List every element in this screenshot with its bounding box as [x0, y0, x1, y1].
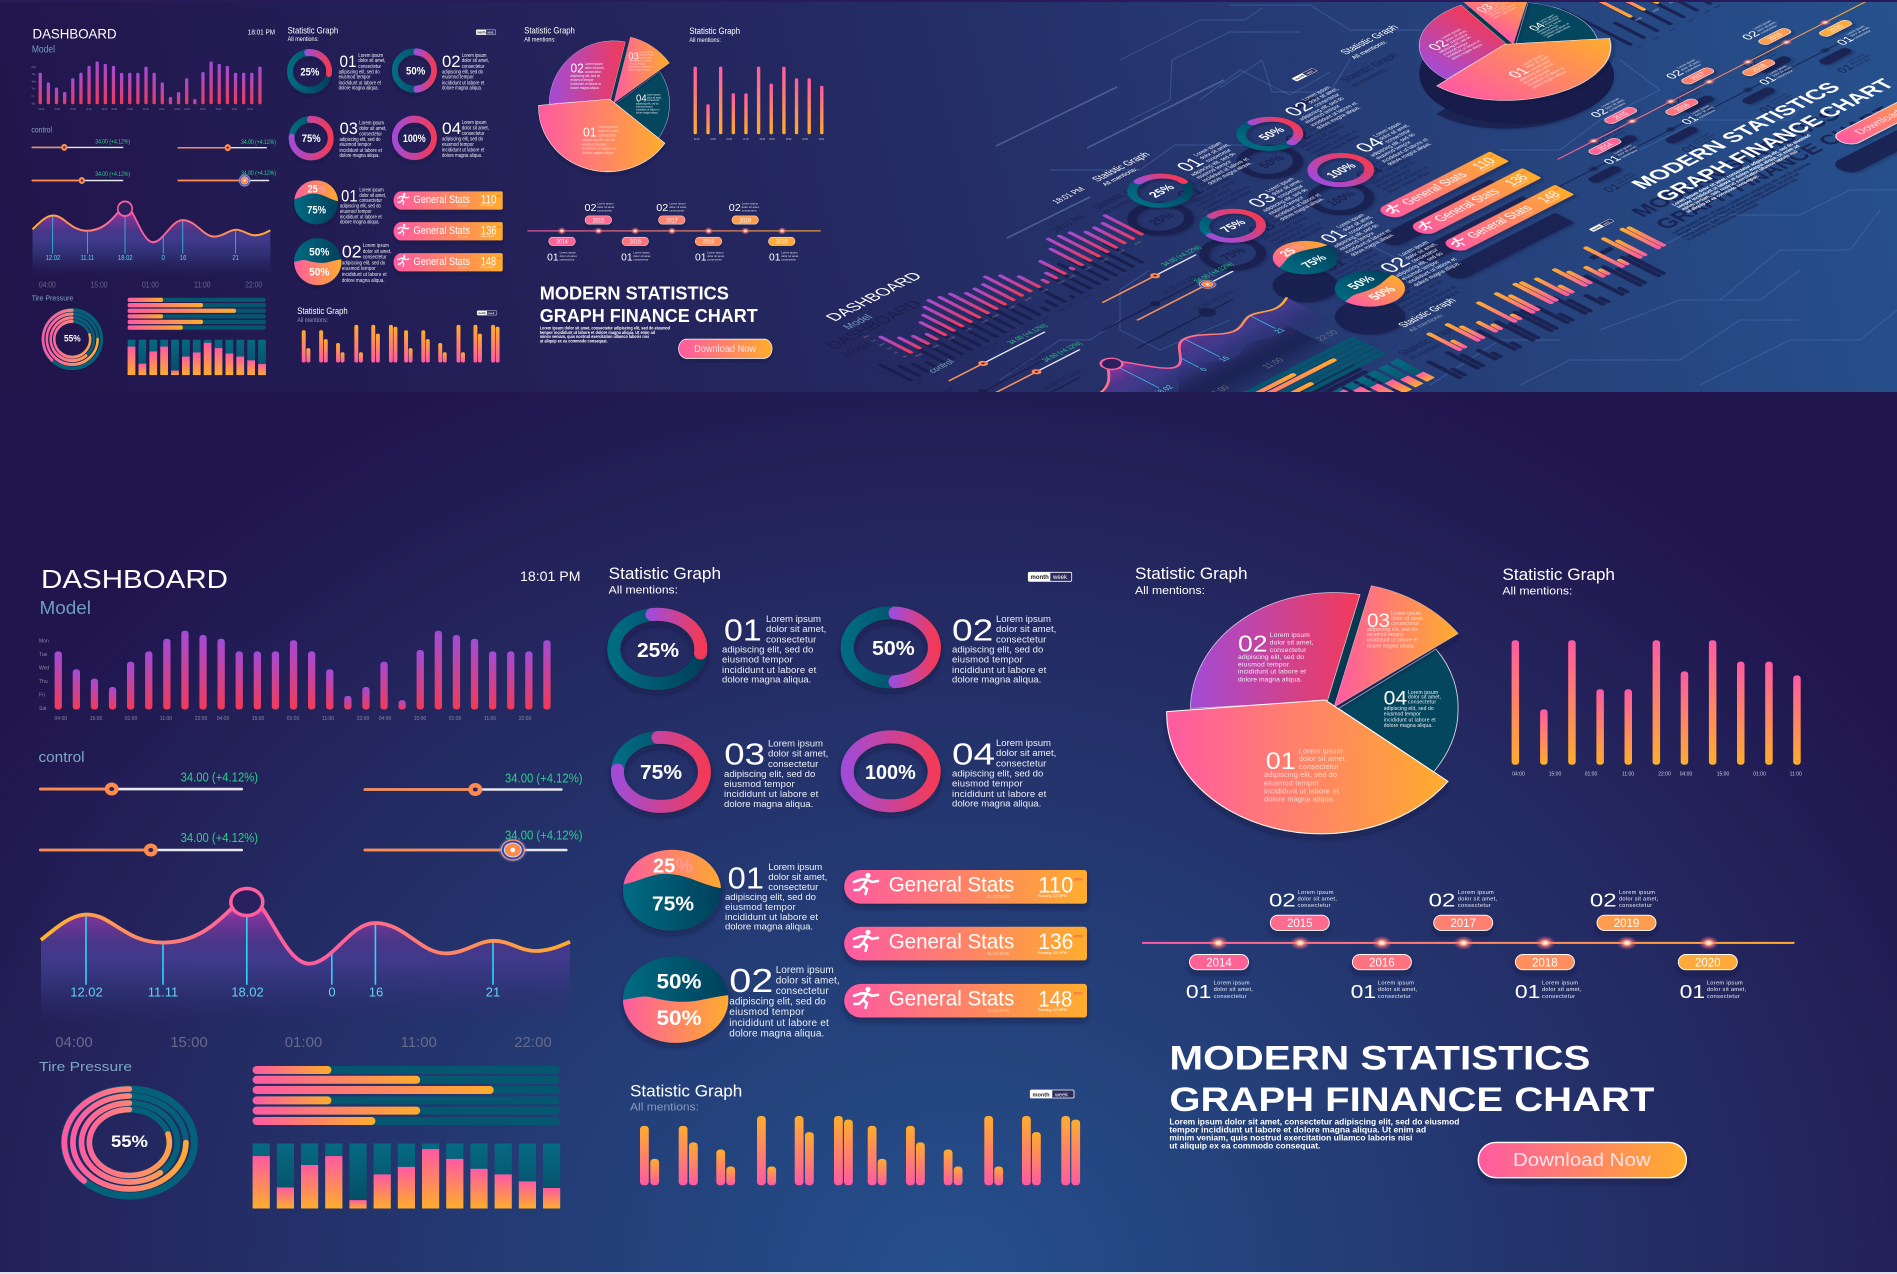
- text block 02: eiusmod tempor: [952, 654, 1023, 666]
- text block 03: dolor sit amet,: [768, 749, 828, 760]
- general stats bar 148: Running 110 BPM: [1038, 1008, 1067, 1012]
- upper timeline notes: consectetur: [1458, 903, 1491, 909]
- time axis labels: 04:00: [55, 716, 67, 722]
- slice 01: [1167, 700, 1448, 834]
- upper timeline notes: dolor sit amet,: [1298, 896, 1337, 902]
- time axis labels: 11:00: [484, 716, 496, 722]
- slice 03 text: dolore magna aliqua.: [1367, 643, 1415, 649]
- small flat preview of the dashboard: [31, 25, 825, 375]
- slider 2: [364, 772, 582, 796]
- text block split 02: 02: [729, 962, 773, 999]
- general stats bar 148: 148: [1038, 986, 1072, 1011]
- lower timeline notes: [1186, 980, 1747, 1002]
- icon: runner: [854, 873, 878, 894]
- upper timeline notes: consectetur: [1298, 903, 1331, 909]
- upper timeline notes: 02: [1429, 889, 1455, 910]
- text block 03: eiusmod tempor: [724, 779, 795, 790]
- statistic graph heading, thin bars: All mentions:: [1502, 586, 1572, 598]
- dark extruded shadow copy: [826, 2, 1897, 392]
- text block split 01: Lorem ipsum: [768, 862, 822, 873]
- stacked vertical bars: [253, 1144, 560, 1208]
- slice 03: [1334, 586, 1458, 707]
- split circle 25 and 75 percent: [620, 845, 725, 931]
- time axis: [55, 1034, 552, 1051]
- pie chart extruded shadow: [1420, 60, 1614, 124]
- timeline glow points: [1208, 936, 1719, 950]
- text block 02: adipiscing elit, sed do: [952, 645, 1043, 656]
- text block 01: incididunt ut labore et: [722, 665, 817, 676]
- split circle 25 and 75 percent: 25%: [653, 855, 693, 877]
- text block 02: [952, 613, 1056, 686]
- upper timeline notes: 02: [1590, 889, 1617, 910]
- slice 04: [1339, 649, 1458, 772]
- value labels: 12.02: [70, 984, 103, 1000]
- slice 02 text: eiusmod tempor: [1238, 662, 1290, 668]
- slice 04 text: consectetur: [1408, 700, 1436, 706]
- model heading: Model: [40, 598, 91, 618]
- statistic graph heading, paired bars: [630, 1081, 742, 1114]
- lower timeline notes: Lorem ipsum: [1542, 980, 1578, 986]
- upper timeline notes: dolor sit amet,: [1619, 896, 1659, 902]
- text block 01: Lorem ipsum: [766, 614, 821, 625]
- time axis: 01:00: [285, 1034, 322, 1051]
- thin bar time labels: 15:00: [1717, 771, 1729, 777]
- slice 03 text: consectetur: [1391, 621, 1419, 627]
- main flat dashboard: [38, 564, 1802, 1208]
- general stats bar 110: Running 110 BPM: [1038, 894, 1067, 898]
- slice 02 text: [1238, 630, 1313, 683]
- upper timeline notes: Lorem ipsum: [1298, 890, 1334, 896]
- dashboard title: DASHBOARD: [41, 564, 228, 594]
- thin bar time labels: 01:00: [1585, 771, 1597, 777]
- text block split 01: adipiscing elit, sed do: [725, 892, 816, 903]
- time axis labels: 11:00: [322, 716, 334, 722]
- text block 04: 04: [952, 736, 995, 771]
- day axis labels: Thu: [39, 679, 48, 685]
- month week toggle: week: [1054, 1092, 1068, 1098]
- time axis labels: 11:00: [160, 716, 172, 722]
- time axis labels: 01:00: [125, 716, 137, 722]
- slice 03 text: Lorem ipsum: [1391, 611, 1421, 617]
- statistic graph heading, thin bars: [1502, 565, 1615, 598]
- slice 01 text: Lorem ipsum: [1299, 747, 1343, 756]
- donut 100 percent: 100%: [865, 762, 916, 784]
- time axis labels: 15:00: [414, 716, 426, 722]
- lower timeline notes: dolor sit amet,: [1707, 987, 1747, 993]
- general stats bar 148: General Stats: [889, 987, 1014, 1010]
- text block 04: eiusmod tempor: [952, 778, 1023, 790]
- text block 04: [952, 736, 1056, 810]
- general stats bar 136: Running 110 BPM: [1038, 951, 1067, 955]
- day axis labels: Wed: [39, 666, 49, 672]
- lower timeline notes: dolor sit amet,: [1214, 987, 1253, 993]
- time axis labels: 04:00: [217, 716, 229, 722]
- text block 03: adipiscing elit, sed do: [724, 769, 815, 780]
- year labels: 2016: [1369, 957, 1395, 969]
- text block 01: dolore magna aliqua.: [722, 675, 811, 686]
- text block split 01: dolore magna aliqua.: [725, 922, 813, 933]
- time axis labels: 22:00: [195, 716, 207, 722]
- text block 02: 02: [952, 613, 993, 648]
- main headline: [1169, 1040, 1655, 1119]
- upper timeline notes: dolor sit amet,: [1458, 896, 1498, 902]
- tire pressure heading: Tire Pressure: [39, 1059, 132, 1074]
- general stats bar 136: General Stats: [889, 930, 1014, 953]
- text block 01: eiusmod tempor: [722, 654, 793, 666]
- month week toggle: week: [1052, 575, 1068, 581]
- lower timeline notes: dolor sit amet,: [1378, 987, 1418, 993]
- text block split 02: Lorem ipsum: [776, 965, 834, 976]
- horizontal progress bars: [253, 1066, 560, 1125]
- year labels: [1206, 918, 1721, 969]
- statistic graph heading, donut section: Statistic Graph: [609, 564, 721, 583]
- statistic graph heading, pie chart: All mentions:: [1135, 585, 1205, 597]
- split circle 50 and 50 percent: 50%: [656, 1007, 702, 1030]
- upper timeline notes: consectetur: [1619, 903, 1652, 909]
- general stats bar 136: 136: [1038, 929, 1073, 954]
- upper timeline notes: [1269, 889, 1659, 910]
- slice 02 text: dolor sit amet,: [1270, 640, 1313, 647]
- slice 01 text: [1264, 747, 1347, 803]
- time axis labels: [55, 716, 531, 722]
- slice 03 text: [1367, 611, 1424, 649]
- text block 03: dolore magna aliqua.: [724, 799, 813, 810]
- slice 01 text: incididunt ut labore et: [1264, 786, 1339, 795]
- control heading: control: [38, 749, 84, 766]
- slider 1: [39, 771, 258, 796]
- year labels: 2017: [1450, 918, 1476, 930]
- general stats bar 110: 110: [1038, 872, 1073, 897]
- lower timeline notes: consectetur: [1214, 994, 1247, 1000]
- model bar chart: [39, 631, 551, 722]
- thin bar time labels: 22:00: [1658, 771, 1671, 777]
- year labels: 2014: [1206, 957, 1232, 969]
- slice 04 text: 04: [1384, 688, 1408, 710]
- slice 04 text: adipiscing elit, sed do: [1384, 706, 1434, 712]
- year labels: 2020: [1695, 957, 1721, 969]
- lower background panel: [0, 392, 1897, 1274]
- lower timeline notes: 01: [1351, 981, 1376, 1002]
- text block split 02: [729, 962, 840, 1040]
- thin bar chart: [1512, 640, 1802, 777]
- lower timeline notes: consectetur: [1707, 994, 1740, 1000]
- lower timeline notes: Lorem ipsum: [1707, 980, 1743, 986]
- text block 02: consectetur: [996, 634, 1047, 645]
- month week toggle: [1030, 1090, 1074, 1098]
- general stats bar 136: [844, 927, 1087, 960]
- text block 03: incididunt ut labore et: [724, 789, 819, 800]
- text block 02: Lorem ipsum: [996, 614, 1051, 625]
- statistic graph heading, donut section: [609, 564, 721, 596]
- time axis: 11:00: [400, 1034, 437, 1051]
- general stats bar 148: BPM: [1074, 990, 1083, 995]
- text block 04: dolor sit amet,: [996, 748, 1056, 759]
- split circle 25 and 75 percent: 75%: [652, 894, 694, 916]
- text block 01: consectetur: [766, 634, 817, 645]
- split circle 50 and 50 percent: 50%: [656, 970, 702, 993]
- text block 03: [724, 737, 828, 810]
- donut 50 percent: [847, 613, 934, 682]
- statistic graph heading, thin bars: Statistic Graph: [1502, 565, 1615, 584]
- slice 02 text: Lorem ipsum: [1270, 632, 1310, 639]
- slice 03 text: dolor sit amet,: [1391, 616, 1424, 622]
- general stats bar 136: BPM: [1074, 933, 1083, 938]
- slider 4 with glowing knob: [364, 829, 582, 863]
- year labels: 2018: [1532, 957, 1558, 969]
- tire pressure concentric ring chart: 55%: [111, 1132, 148, 1151]
- text block 01: adipiscing elit, sed do: [722, 645, 813, 656]
- text block 02: dolore magna aliqua.: [952, 675, 1041, 686]
- time axis labels: 22:00: [357, 716, 369, 722]
- thin bar time labels: 04:00: [1512, 771, 1525, 777]
- text block 01: 01: [724, 613, 762, 648]
- text block 02: dolor sit amet,: [996, 624, 1056, 635]
- text block split 02: eiusmod tempor: [729, 1007, 805, 1018]
- text block 02: incididunt ut labore et: [952, 665, 1047, 676]
- text block split 02: incididunt ut labore et: [729, 1018, 829, 1029]
- general stats bar 148: 11.12.2019: [987, 1008, 1009, 1013]
- statistic graph heading, pie chart: Statistic Graph: [1135, 564, 1248, 583]
- slice 04 text: [1384, 688, 1441, 729]
- slice 02 text: incididunt ut labore et: [1238, 669, 1306, 676]
- day axis labels: [39, 638, 49, 712]
- headline body copy: [1169, 1116, 1459, 1151]
- text block split 02: consectetur: [776, 986, 829, 997]
- value labels: 16: [369, 984, 383, 1000]
- slice 04 text: dolor sit amet,: [1408, 695, 1441, 701]
- slice 01 text: adipiscing elit, sed do: [1264, 770, 1337, 779]
- value labels: 11.11: [148, 984, 178, 1000]
- slice 04 text: dolore magna aliqua.: [1384, 723, 1433, 729]
- lower timeline notes: Lorem ipsum: [1214, 980, 1250, 986]
- slice 03 text: eiusmod tempor: [1367, 632, 1404, 638]
- slice 02: [1190, 593, 1360, 708]
- lower timeline notes: 01: [1515, 981, 1540, 1002]
- split circle 50 and 50 percent: [620, 956, 730, 1045]
- slider 4 with glowing knob: 34.00 (+4.12%): [505, 829, 582, 843]
- slice 01 text: eiusmod tempor: [1264, 778, 1320, 787]
- statistic graph heading, paired bars: Statistic Graph: [630, 1081, 742, 1100]
- donut 25 percent: [614, 614, 701, 684]
- slider 1: 34.00 (+4.12%): [181, 771, 258, 785]
- headline body copy: minim veniam, quis nostrud exercitation ullamco laboris nisi: [1169, 1133, 1412, 1143]
- slice 02 text: 02: [1238, 630, 1268, 656]
- donut 100 percent: [847, 737, 934, 806]
- isometric dashboard layer: [826, 2, 1897, 392]
- slice 01 text: dolor sit amet,: [1299, 754, 1347, 763]
- lower timeline notes: 01: [1186, 981, 1211, 1002]
- time axis labels: 15:00: [90, 716, 102, 722]
- upper timeline notes: Lorem ipsum: [1458, 890, 1494, 896]
- thin bar time labels: 15:00: [1549, 771, 1561, 777]
- slice 01 text: 01: [1266, 748, 1296, 775]
- value labels: 0: [328, 984, 336, 1000]
- statistic graph heading, paired bars: All mentions:: [630, 1102, 699, 1114]
- general stats bar 110: [844, 870, 1087, 904]
- time axis labels: 01:00: [449, 716, 461, 722]
- slice 01 text: consectetur: [1299, 762, 1339, 771]
- gap behind slices: [1327, 607, 1365, 704]
- year pills: [1190, 915, 1737, 970]
- text block 03: Lorem ipsum: [768, 738, 823, 749]
- main headline: MODERN STATISTICS: [1169, 1040, 1590, 1078]
- value labels: 18.02: [231, 984, 264, 1000]
- text block split 01: incididunt ut labore et: [725, 912, 818, 923]
- icon: runner: [854, 930, 878, 951]
- slider 3: [39, 831, 258, 856]
- donut 50 percent: 50%: [872, 638, 915, 660]
- download button: Download Now: [1513, 1150, 1652, 1170]
- text block split 01: eiusmod tempor: [725, 902, 796, 913]
- thin bar time labels: 11:00: [1790, 771, 1802, 777]
- slider 2: 34.00 (+4.12%): [505, 772, 582, 786]
- year labels: 2015: [1287, 918, 1313, 930]
- donut 75 percent: 75%: [640, 762, 682, 784]
- slice 03 text: 03: [1367, 611, 1390, 632]
- download button: [1478, 1142, 1686, 1178]
- general stats bar 136: 11.12.2019: [987, 951, 1009, 956]
- text block split 01: consectetur: [768, 882, 819, 893]
- day axis labels: Tue: [39, 652, 48, 658]
- text block 04: consectetur: [996, 758, 1047, 769]
- text block split 01: [725, 860, 827, 933]
- exploded pie chart: [1167, 586, 1458, 834]
- lower timeline notes: Lorem ipsum: [1378, 980, 1414, 986]
- upper timeline notes: 02: [1269, 889, 1296, 910]
- slice 02 text: consectetur: [1270, 647, 1307, 654]
- paired bar chart: [640, 1116, 1080, 1185]
- donut 75 percent: [617, 737, 704, 806]
- text block 04: incididunt ut labore et: [952, 789, 1047, 800]
- statistic graph heading, donut section: All mentions:: [609, 584, 678, 596]
- text block split 01: 01: [728, 860, 764, 895]
- text block split 02: adipiscing elit, sed do: [729, 996, 826, 1007]
- year labels: 2019: [1614, 918, 1639, 930]
- slice 03 text: incididunt ut labore et: [1367, 638, 1419, 644]
- general stats bar 110: BPM: [1074, 876, 1083, 882]
- time axis: 15:00: [170, 1034, 208, 1051]
- month week toggle: month: [1030, 575, 1049, 581]
- circuit board line background: [996, 5, 1897, 385]
- text block split 01: dolor sit amet,: [768, 872, 827, 883]
- slice 04 text: incididunt ut labore et: [1384, 717, 1436, 723]
- time axis labels: 01:00: [287, 716, 299, 722]
- slice 04 text: eiusmod tempor: [1384, 712, 1421, 718]
- slice 02 text: adipiscing elit, sed do: [1238, 654, 1304, 661]
- month week toggle: month: [1032, 1092, 1050, 1098]
- lower timeline notes: dolor sit amet,: [1542, 987, 1582, 993]
- thin bar time labels: [1512, 771, 1802, 777]
- line area chart: [41, 888, 570, 1025]
- lower timeline notes: 01: [1680, 981, 1705, 1002]
- value labels: 21: [486, 984, 500, 1000]
- tire pressure concentric ring chart: [64, 1089, 194, 1196]
- month week toggle: [1028, 572, 1072, 581]
- lower timeline notes: consectetur: [1378, 994, 1411, 1000]
- top background band: [0, 0, 1897, 392]
- value labels: [70, 984, 500, 1000]
- thin bar time labels: 11:00: [1622, 771, 1634, 777]
- headline body copy: ut aliquip ex ea commodo consequat.: [1169, 1141, 1320, 1151]
- donut 25 percent: 25%: [637, 640, 679, 662]
- time axis: 22:00: [514, 1034, 552, 1051]
- day axis labels: Sat: [39, 706, 47, 712]
- thin bar time labels: 01:00: [1753, 771, 1766, 777]
- text block 03: consectetur: [768, 759, 819, 770]
- slice 03 text: adipiscing elit, sed do: [1367, 627, 1417, 633]
- isometric perspective view of the dashboard: [826, 2, 1897, 392]
- time axis labels: 22:00: [519, 716, 531, 722]
- time axis labels: 04:00: [379, 716, 391, 722]
- general stats bar 110: 11.12.2019: [987, 894, 1009, 899]
- text block split 02: dolore magna aliqua.: [729, 1029, 824, 1040]
- day axis labels: Fri: [39, 692, 45, 698]
- slider 3: 34.00 (+4.12%): [181, 831, 258, 845]
- headline body copy: tempor incididunt ut labore et dolore magna aliqua. Ut enim ad: [1169, 1125, 1426, 1135]
- slice 02 text: dolore magna aliqua.: [1238, 676, 1302, 683]
- day axis labels: Mon: [39, 638, 49, 644]
- general stats bar 148: [844, 984, 1087, 1018]
- slice 04 text: Lorem ipsum: [1408, 690, 1438, 696]
- text block 04: dolore magna aliqua.: [952, 799, 1041, 810]
- time axis: 04:00: [55, 1034, 93, 1051]
- text block 01: dolor sit amet,: [766, 624, 826, 635]
- headline body copy: Lorem ipsum dolor sit amet, consectetur adipiscing elit, sed do eiusmod: [1169, 1116, 1459, 1126]
- thin bar time labels: 04:00: [1680, 771, 1692, 777]
- text block 03: 03: [724, 737, 765, 772]
- clock: 18:01 PM: [520, 568, 580, 584]
- main headline: GRAPH FINANCE CHART: [1169, 1081, 1655, 1119]
- lower timeline notes: consectetur: [1542, 994, 1575, 1000]
- slice 01 text: dolore magna aliqua.: [1264, 794, 1335, 803]
- statistic graph heading, pie chart: [1135, 564, 1248, 597]
- icon: runner: [854, 987, 878, 1008]
- timeline: [1142, 889, 1794, 1002]
- text block 01: [722, 613, 826, 686]
- general stats bar 110: General Stats: [889, 874, 1014, 896]
- time axis labels: 15:00: [252, 716, 264, 722]
- upper timeline notes: Lorem ipsum: [1619, 890, 1655, 896]
- text block 04: Lorem ipsum: [996, 738, 1051, 749]
- text block 04: adipiscing elit, sed do: [952, 769, 1043, 780]
- text block split 02: dolor sit amet,: [776, 975, 840, 986]
